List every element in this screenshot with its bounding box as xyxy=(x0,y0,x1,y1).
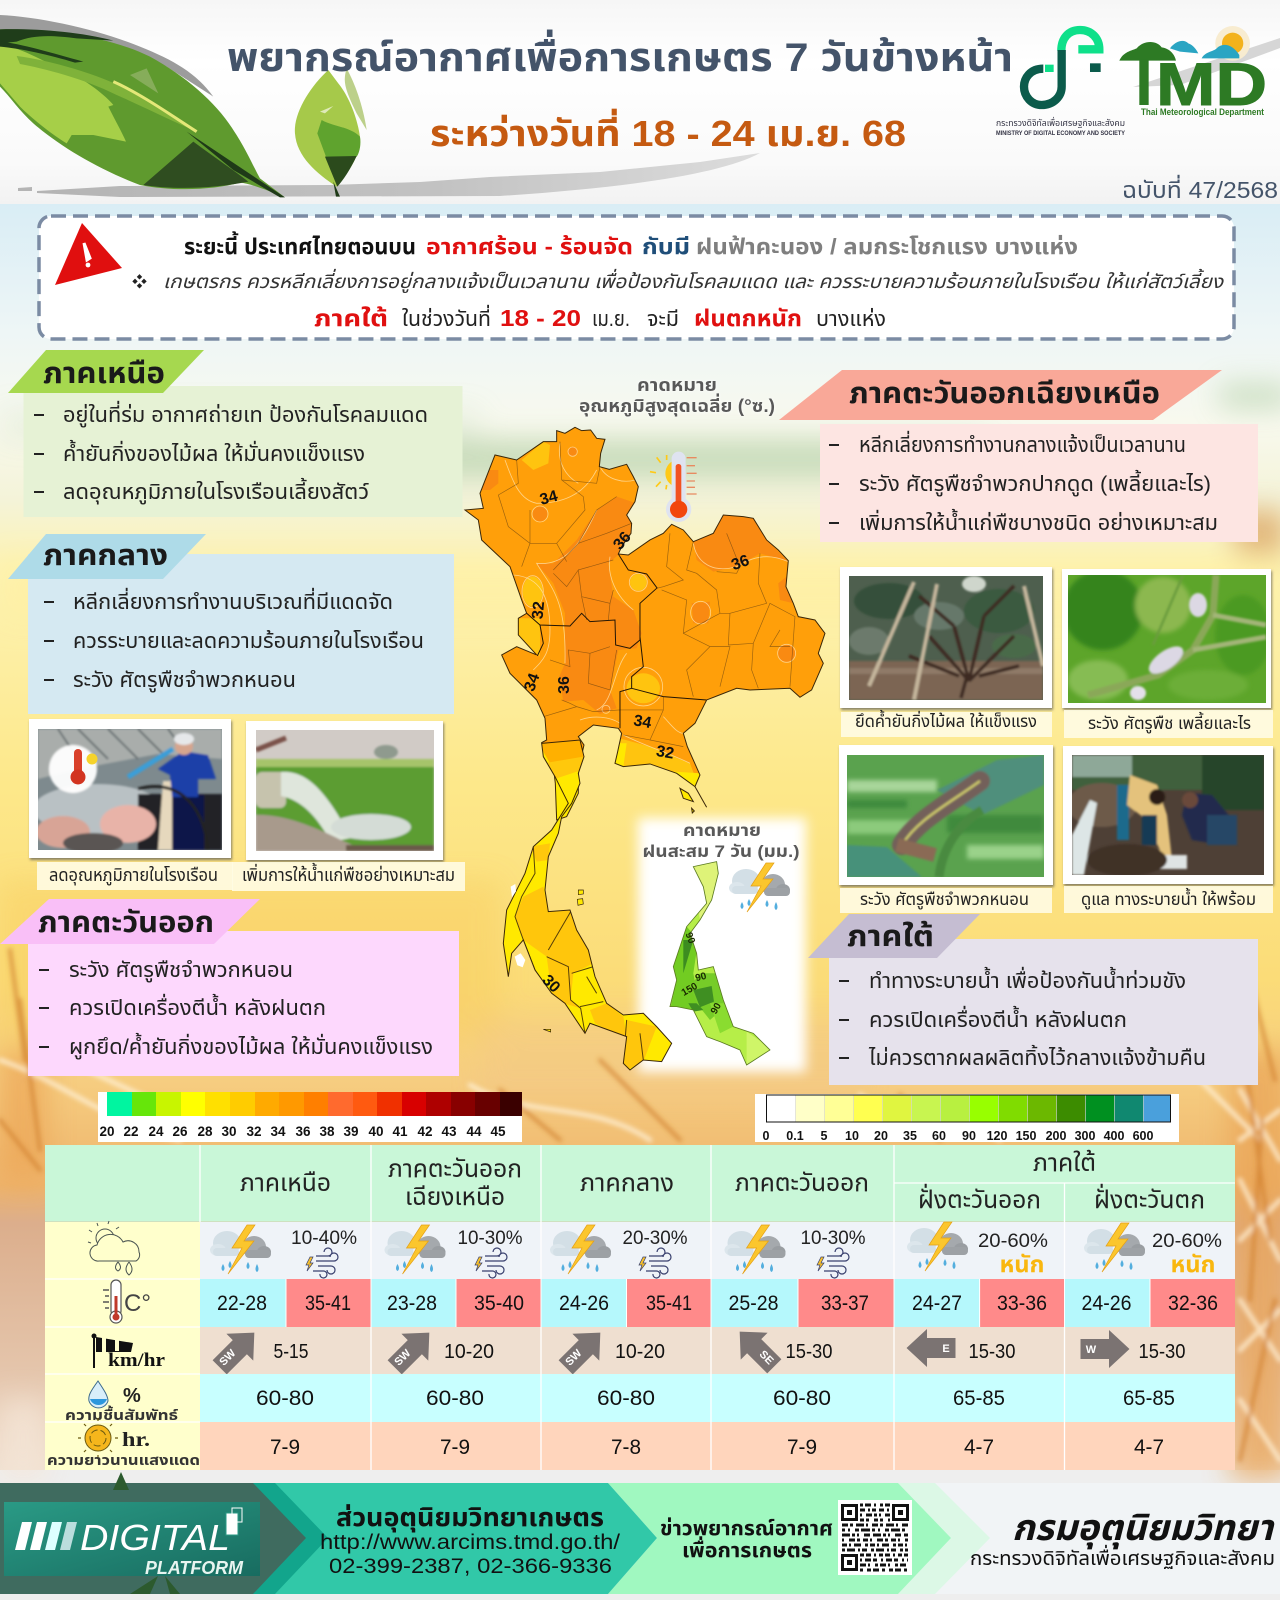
alert line 1: ฝนฟ้าคะนอง / ลมกระโชกแรง บางแห่ง xyxy=(696,234,1078,259)
table row: relative humidity xyxy=(200,1374,1235,1422)
legend: temperature scale: 24 xyxy=(148,1124,164,1139)
alert line 1: ระยะนี้ ประเทศไทยตอนบน xyxy=(184,231,416,259)
table row: wind direction and speed: 5-15 xyxy=(274,1341,308,1363)
legend: rainfall scale: 400 xyxy=(1104,1129,1124,1143)
panel: south region xyxy=(808,914,1258,1085)
legend: rainfall scale: 60 xyxy=(932,1129,946,1143)
map: accumulated rainfall, south: 90 xyxy=(683,931,697,946)
table row: sunshine hours: 7-9 xyxy=(270,1436,300,1459)
heading tab: northeast: ภาคตะวันออกเฉียงเหนือ xyxy=(849,378,1160,410)
south advice list: ควรเปิดเครื่องตีน้ำ หลังฝนตก xyxy=(869,1005,1127,1032)
northeast advice list: ระวัง ศัตรูพืชจำพวกปากดูด (เพลี้ยและไร) xyxy=(859,469,1211,497)
photo caption: pests xyxy=(1064,710,1273,738)
photo caption: drainage: ดูแล ทางระบายน้ำ ให้พร้อม xyxy=(1081,887,1256,911)
table row: min and max temperature: 22-28 xyxy=(217,1292,267,1315)
table row: weather and rain chance: หนัก xyxy=(1000,1251,1044,1277)
table row: weather and rain chance: 20-60% xyxy=(1152,1231,1222,1252)
icon: sunshine duration xyxy=(47,1418,200,1468)
legend: temperature scale: 39 xyxy=(343,1124,359,1139)
legend: rainfall scale: 0 xyxy=(763,1129,770,1143)
alert line 1: กับมี xyxy=(642,234,690,259)
logo: Ministry of Digital Economy and Society: กระทรวงดิจิทัลเพื่อเศรษฐกิจและสังคม xyxy=(996,116,1125,128)
photo: propped fruit tree xyxy=(840,567,1052,708)
east advice list xyxy=(39,959,433,1060)
footer text: agricultural weather news xyxy=(660,1518,833,1562)
east advice list: ระวัง ศัตรูพืชจำพวกหนอน xyxy=(69,959,293,983)
table row: weather and rain chance xyxy=(200,1222,1235,1279)
icon: cloud sun and rain xyxy=(88,1221,140,1275)
heading tab: south: ภาคใต้ xyxy=(847,921,934,953)
table row: min and max temperature: 35-41 xyxy=(646,1292,692,1315)
logo: TMD Thai Meteorological Department xyxy=(1119,26,1267,118)
table row: weather and rain chance: 10-30% xyxy=(458,1228,523,1249)
alert line 3 xyxy=(314,304,886,331)
alert line 3: ในช่วงวันที่ xyxy=(402,304,491,331)
table header row: ฝั่งตะวันตก xyxy=(1094,1183,1205,1214)
logo: Ministry of Digital Economy and Society xyxy=(996,30,1126,137)
legend: rainfall scale: 5 xyxy=(821,1129,828,1143)
map: maximum temperature, upper Thailand: 32 xyxy=(655,743,675,763)
table row: sunshine hours: 7-9 xyxy=(440,1436,470,1459)
legend: rainfall scale: 20 xyxy=(874,1129,888,1143)
map: accumulated rainfall, south xyxy=(670,861,770,1066)
footer text: Thai Meteorological Department: กระทรวงดิจิทัลเพื่อเศรษฐกิจและสังคม xyxy=(970,1544,1275,1570)
legend: temperature scale: 20 xyxy=(99,1124,115,1139)
footer text: Thai Meteorological Department xyxy=(970,1507,1275,1570)
legend: temperature scale: 32 xyxy=(246,1124,262,1139)
icon: sunshine duration: hr. xyxy=(122,1429,150,1451)
table row: wind direction and speed: SW xyxy=(217,1347,239,1368)
table header row: ภาคใต้ xyxy=(1033,1149,1096,1177)
table row: min and max temperature: 24-26 xyxy=(559,1292,609,1315)
icon: thunderstorm cloud xyxy=(729,863,790,912)
photo captions: left: ลดอุณหภูมิภายในโรงเรือน xyxy=(49,865,218,887)
footer text: Thai Meteorological Department: กรมอุตุนิยมวิทยา xyxy=(1012,1507,1275,1550)
footer text: agricultural weather news: เพื่อการเกษตร xyxy=(682,1536,812,1562)
legend: temperature scale xyxy=(98,1092,522,1142)
table: regional forecast summary xyxy=(45,1145,1235,1470)
table row: relative humidity: 60-80 xyxy=(426,1387,484,1410)
table row: wind direction and speed: SW xyxy=(392,1347,414,1368)
table row: min and max temperature: 35-41 xyxy=(305,1292,351,1315)
table row: relative humidity: 65-85 xyxy=(1123,1387,1175,1410)
icon: windsock km/hr xyxy=(92,1334,166,1371)
heading: temperature map title xyxy=(579,375,775,417)
legend: temperature scale: 26 xyxy=(172,1124,188,1139)
heading tab: central: ภาคกลาง xyxy=(43,540,168,572)
northeast advice list: เพิ่มการให้น้ำแก่พืชบางชนิด อย่างเหมาะสม xyxy=(859,508,1218,535)
table header row xyxy=(45,1145,1235,1222)
table header row: เฉียงเหนือ xyxy=(405,1183,505,1211)
map: maximum temperature, upper Thailand xyxy=(464,426,826,821)
table row: min and max temperature xyxy=(200,1279,1235,1327)
table row: min and max temperature: 24-26 xyxy=(1082,1292,1132,1315)
legend: rainfall scale: 90 xyxy=(962,1129,976,1143)
north advice list: ลดอุณหภูมิภายในโรงเรือนเลี้ยงสัตว์ xyxy=(63,477,369,505)
heading tab: northeast xyxy=(779,370,1222,420)
legend: temperature scale: 45 xyxy=(490,1124,506,1139)
heading tab: east xyxy=(0,899,260,944)
heading tab: south xyxy=(808,914,980,958)
table row: wind direction and speed: W xyxy=(1086,1344,1097,1356)
heading tab: east: ภาคตะวันออก xyxy=(38,907,214,939)
icon: relative humidity: % xyxy=(123,1385,141,1407)
north advice list: ค้ำยันกิ่งของไม้ผล ให้มั่นคงแข็งแรง xyxy=(63,439,365,466)
footer band xyxy=(0,1472,1280,1594)
legend: rainfall scale: 10 xyxy=(845,1129,859,1143)
footer text: agrometeorology division contact: ส่วนอุตุนิยมวิทยาเกษตร xyxy=(336,1502,604,1533)
table row: min and max temperature: 32-36 xyxy=(1168,1292,1218,1315)
photo caption: propped branches: ยึดค้ำยันกิ่งไม้ผล ให้แข็งแรง xyxy=(855,709,1037,731)
photo: caterpillar on leaf xyxy=(839,745,1053,885)
north advice list xyxy=(34,400,428,505)
east advice list: ผูกยึด/ค้ำยันกิ่งของไม้ผล ให้มั่นคงแข็งแรง xyxy=(69,1032,433,1060)
panel: north region xyxy=(8,350,462,517)
alert line 3: 18 - 20 xyxy=(500,305,581,331)
table row: min and max temperature: 33-37 xyxy=(821,1292,869,1315)
legend: rainfall scale: 600 xyxy=(1133,1129,1153,1143)
map: maximum temperature, southern peninsula: 30 xyxy=(539,972,563,997)
map: maximum temperature, upper Thailand: 36 xyxy=(610,529,635,553)
alert line 3: บางแห่ง xyxy=(816,307,886,331)
subtitle: date range: ระหว่างวันที่ 18 - 24 เม.ย. 68 xyxy=(430,108,906,154)
QR code xyxy=(838,1500,912,1575)
alert panel xyxy=(39,216,1234,339)
alert line 3: เม.ย. xyxy=(592,308,630,331)
icon: relative humidity xyxy=(65,1381,178,1423)
heading: rainfall map title xyxy=(642,821,800,861)
photo captions: left: เพิ่มการให้น้ำแก่พืชอย่างเหมาะสม xyxy=(242,862,455,885)
map: accumulated rainfall, south: 150 xyxy=(680,981,700,999)
map: maximum temperature, upper Thailand: 36 xyxy=(556,676,573,694)
title: พยากรณ์อากาศเพื่อการเกษตร 7 วันข้างหน้า xyxy=(227,29,1013,80)
logo: Ministry of Digital Economy and Society: MINISTRY OF DIGITAL ECONOMY AND SOCIETY xyxy=(996,130,1126,137)
table row: min and max temperature: 24-27 xyxy=(912,1292,962,1315)
illustration: small leaf xyxy=(295,68,367,197)
central advice list: ควรระบายและลดความร้อนภายในโรงเรือน xyxy=(73,629,424,653)
icon: thermometer Celsius xyxy=(103,1280,151,1323)
legend: temperature scale: 40 xyxy=(368,1124,384,1139)
table header row: ภาคกลาง xyxy=(580,1169,674,1197)
legend: temperature scale: 44 xyxy=(466,1124,482,1139)
table row: min and max temperature: 35-40 xyxy=(474,1292,524,1315)
icon: warning triangle xyxy=(55,223,122,285)
panel: rainfall map xyxy=(642,821,800,1070)
legend: rainfall scale xyxy=(755,1094,1179,1143)
photo caption: propped branches xyxy=(841,709,1052,737)
table row: weather and rain chance: 10-30% xyxy=(800,1228,866,1249)
photo caption: drainage xyxy=(1064,886,1273,913)
legend: temperature scale: 38 xyxy=(319,1124,335,1139)
alert line 1 xyxy=(184,231,1078,259)
table row labels column xyxy=(45,1221,200,1470)
table row: relative humidity: 60-80 xyxy=(773,1387,831,1410)
table row: relative humidity: 60-80 xyxy=(597,1387,655,1410)
table row: sunshine hours: 7-8 xyxy=(611,1436,641,1459)
table row: wind direction and speed: 10-20 xyxy=(444,1341,494,1363)
legend: temperature scale: 34 xyxy=(270,1124,286,1139)
icon: relative humidity: ความชื้นสัมพัทธ์ xyxy=(65,1405,178,1423)
icon: windsock km/hr: km/hr xyxy=(108,1350,166,1371)
table header row: ภาคตะวันออก xyxy=(735,1169,869,1197)
map: accumulated rainfall, south: 90 xyxy=(694,971,708,984)
icon: thermometer Celsius: C° xyxy=(124,1290,151,1317)
alert line 3: จะมี xyxy=(647,308,679,331)
heading: temperature map title: อุณหภูมิสูงสุดเฉลี่ย (°ซ.) xyxy=(579,393,775,417)
table row: sunshine hours: 4-7 xyxy=(964,1436,994,1459)
panel: central region xyxy=(8,534,454,714)
logo: TMD Thai Meteorological Department: MD xyxy=(1156,51,1267,118)
north advice list: อยู่ในที่ร่ม อากาศถ่ายเท ป้องกันโรคลมแดด xyxy=(63,400,428,428)
table header row: ฝั่งตะวันออก xyxy=(918,1183,1041,1214)
photo: farmers clearing drainage xyxy=(1063,746,1273,884)
legend: rainfall scale: 200 xyxy=(1046,1129,1066,1143)
heading tab: north: ภาคเหนือ xyxy=(43,358,165,390)
photo: pumping water to rice field xyxy=(246,721,443,860)
footer text: agrometeorology division contact xyxy=(320,1502,620,1578)
table row: weather and rain chance: 20-30% xyxy=(622,1228,688,1249)
legend: rainfall scale: 150 xyxy=(1016,1129,1036,1143)
decorative swoosh xyxy=(37,153,760,197)
table row: relative humidity: 65-85 xyxy=(953,1387,1005,1410)
map: maximum temperature, upper Thailand: 32 xyxy=(530,601,548,620)
legend: temperature scale: 30 xyxy=(221,1124,237,1139)
table row: wind direction and speed xyxy=(200,1318,1235,1381)
east advice list: ควรเปิดเครื่องตีน้ำ หลังฝนตก xyxy=(69,993,326,1020)
table row: weather and rain chance: 10-40% xyxy=(291,1228,357,1249)
legend: rainfall scale: 35 xyxy=(903,1129,917,1143)
footer text: agricultural weather news: ข่าวพยากรณ์อากาศ xyxy=(660,1518,833,1540)
map: maximum temperature, upper Thailand: 34 xyxy=(632,712,653,732)
icon: sunshine duration: ความยาวนานแสงแดด xyxy=(47,1452,200,1468)
map: accumulated rainfall, south: 90 xyxy=(709,1001,724,1016)
photo: cooling pig house xyxy=(29,719,231,858)
panel: rainfall map backdrop xyxy=(638,818,806,1072)
issue number: ฉบับที่ 47/2568 xyxy=(1122,174,1278,203)
logo: Digital Platform xyxy=(4,1502,260,1578)
heading: temperature map title: คาดหมาย xyxy=(637,375,717,395)
header band xyxy=(0,0,1280,204)
legend: temperature scale: 36 xyxy=(295,1124,311,1139)
alert line 1: อากาศร้อน - ร้อนจัด xyxy=(426,234,633,259)
heading tab: central xyxy=(8,534,206,579)
heading tab: north xyxy=(8,350,204,393)
table row: sunshine hours: 7-9 xyxy=(787,1436,817,1459)
legend: rainfall scale: 120 xyxy=(987,1129,1007,1143)
alert line 2: ❖ xyxy=(132,274,147,291)
table row: wind direction and speed: E xyxy=(942,1343,950,1355)
table row: wind direction and speed: 15-30 xyxy=(1138,1341,1186,1363)
central advice list xyxy=(44,587,424,693)
table row: min and max temperature: 33-36 xyxy=(997,1292,1047,1315)
legend: temperature scale: 42 xyxy=(417,1124,433,1139)
photo caption: pests: ระวัง ศัตรูพืช เพลี้ยและไร xyxy=(1088,711,1251,735)
map: maximum temperature, upper Thailand: 34 xyxy=(521,671,543,694)
table row: wind direction and speed: 10-20 xyxy=(615,1341,665,1363)
table row: wind direction and speed: 15-30 xyxy=(968,1341,1016,1363)
northeast advice list xyxy=(829,430,1218,535)
legend: temperature scale: 43 xyxy=(441,1124,457,1139)
photo caption: caterpillar pests xyxy=(840,888,1052,913)
panel: northeast region xyxy=(779,370,1258,542)
decorative footer chevrons xyxy=(898,1483,990,1594)
illustration: large green leaf xyxy=(0,15,285,197)
northeast advice list: หลีกเลี่ยงการทำงานกลางแจ้งเป็นเวลานาน xyxy=(859,430,1186,457)
south advice list: ทำทางระบายน้ำ เพื่อป้องกันน้ำท่วมขัง xyxy=(869,966,1186,993)
heading: rainfall map title: คาดหมาย xyxy=(683,821,761,840)
table row: sunshine hours xyxy=(200,1422,1235,1470)
footer text: agrometeorology division contact: 02-399-2387, 02-366-9336 xyxy=(329,1555,612,1578)
photo caption: caterpillar pests: ระวัง ศัตรูพืชจำพวกหนอน xyxy=(860,890,1029,911)
table row: wind direction and speed: 15-30 xyxy=(786,1341,832,1363)
central advice list: หลีกเลี่ยงการทำงานบริเวณที่มีแดดจัด xyxy=(73,587,393,614)
map: maximum temperature, upper Thailand: 34 xyxy=(538,488,560,509)
legend: temperature scale: 28 xyxy=(197,1124,213,1139)
legend: temperature scale: 41 xyxy=(392,1124,408,1139)
legend: temperature scale: 22 xyxy=(123,1124,139,1139)
panel: east region xyxy=(0,899,459,1076)
table row: weather and rain chance: หนัก xyxy=(1170,1251,1216,1277)
table row: wind direction and speed: SE xyxy=(757,1348,776,1367)
map: maximum temperature, upper Thailand: 36 xyxy=(729,552,752,574)
south advice list: ไม่ควรตากผลผลิตทิ้งไว้กลางแจ้งข้ามคืน xyxy=(868,1044,1206,1070)
logo: Digital Platform: DIGITAL xyxy=(80,1517,230,1558)
alert line 2: เกษตรกร ควรหลีกเลี่ยงการอยู่กลางแจ้งเป็นเวลานาน เพื่อป้องกันโรคลมแดด และ ควรระบายความร้อนภายในโรงเรือน ให้แก่สัตว์เลี้ยง xyxy=(163,268,1224,294)
map: maximum temperature, southern peninsula xyxy=(502,740,672,1071)
photo: mealybugs on stem xyxy=(1062,569,1271,708)
heading: rainfall map title: ฝนสะสม 7 วัน (มม.) xyxy=(642,842,800,861)
legend: rainfall scale: 300 xyxy=(1075,1129,1095,1143)
alert line 3: ภาคใต้ xyxy=(314,305,388,331)
icon: sun and thermometer xyxy=(650,452,697,522)
alert line 3: ฝนตกหนัก xyxy=(694,305,802,331)
table row: min and max temperature: 25-28 xyxy=(728,1292,778,1315)
table row: min and max temperature: 23-28 xyxy=(387,1292,437,1315)
table row: wind direction and speed: SW xyxy=(563,1347,585,1368)
table row: sunshine hours: 4-7 xyxy=(1134,1436,1164,1459)
photo captions: left xyxy=(37,862,465,891)
logo: Digital Platform: PLATFORM xyxy=(145,1558,244,1578)
table row: weather and rain chance: 20-60% xyxy=(978,1231,1048,1252)
table header row: ภาคเหนือ xyxy=(240,1169,331,1197)
table header row: ภาคตะวันออก xyxy=(388,1155,522,1183)
central advice list: ระวัง ศัตรูพืชจำพวกหนอน xyxy=(73,669,296,693)
south advice list xyxy=(839,966,1206,1070)
footer text: agrometeorology division contact: http://www.arcims.tmd.go.th/ xyxy=(320,1531,620,1554)
legend: rainfall scale: 0.1 xyxy=(786,1129,804,1143)
table row: relative humidity: 60-80 xyxy=(256,1387,314,1410)
